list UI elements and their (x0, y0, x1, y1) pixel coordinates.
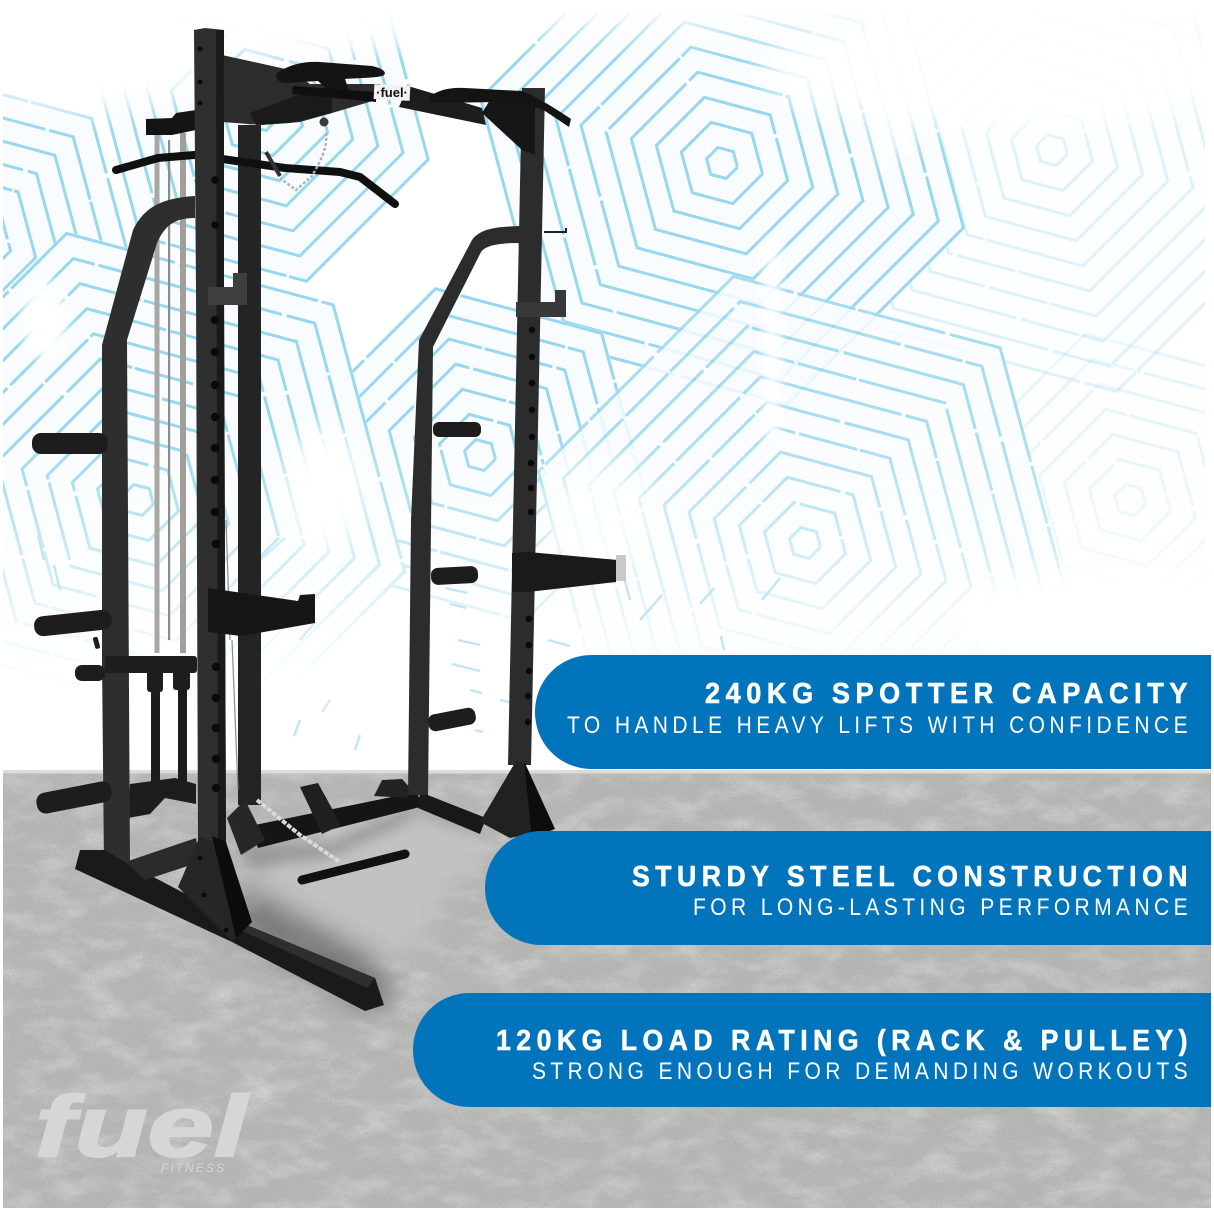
rack: right hook and J-cup (516, 228, 566, 317)
rack: fuel badge: ·fuel· (376, 85, 408, 100)
rack: right handle (429, 88, 571, 127)
rack: crossbar right beam (399, 86, 486, 125)
rack: lat pulldown bar (116, 155, 395, 204)
rack: front left upright (194, 28, 226, 845)
callout: 240kg spotter capacity (535, 655, 1211, 769)
callout: 120kg load rating (413, 993, 1211, 1107)
rack: lower handle bar (302, 854, 405, 880)
rack: lower pulley housing and pedal (227, 783, 341, 855)
rack: guide rods (151, 133, 187, 784)
rack: rear left upright (238, 125, 261, 805)
logo: fuel fitness: fuel (35, 1079, 250, 1175)
rack: left foot and base (75, 836, 384, 1011)
rack: right spotter arm (512, 552, 626, 592)
rack: right upright holes (525, 327, 535, 725)
floor: lighter patch and shadow under rack (228, 805, 500, 1012)
rack: right gusset (480, 761, 555, 838)
rack: left pegs (32, 433, 113, 815)
rack: left handle (276, 62, 385, 94)
rack: left spotter arm (208, 588, 315, 636)
rack: left arch (102, 196, 195, 866)
rack: front left upright holes (198, 46, 220, 792)
product: half rack with pulley (32, 28, 626, 1011)
rack: under bracket (250, 92, 332, 125)
rack: lat pulldown cable (226, 520, 238, 790)
heading: spotter capacity: 240KG SPOTTER CAPACITY (705, 678, 1193, 710)
rack: top chain and clip (266, 118, 328, 190)
rack: head plate (222, 55, 380, 125)
rack: right pegs (427, 422, 481, 732)
background: white wash over pattern (0, 0, 1214, 780)
rack: right upright (508, 88, 545, 765)
rack: front left upright shading (216, 30, 226, 845)
rack: rear base frame (128, 778, 486, 848)
rack: crossbar (292, 86, 376, 102)
logo: fuel fitness: FITNESS (161, 1161, 226, 1175)
rack: weight carriage (93, 636, 197, 692)
rack: top pulley mount (146, 110, 196, 135)
rack: chain to lower handle (257, 800, 340, 862)
floor: concrete (3, 770, 1211, 1208)
background: scattered pattern fragments (38, 535, 780, 750)
background: blue concentric hexagon pattern (3, 13, 1205, 662)
rack: left J-cup (208, 273, 247, 305)
rack: front right gusset (482, 100, 535, 155)
rack: right arch (408, 226, 520, 795)
callout: sturdy steel construction (485, 831, 1211, 945)
